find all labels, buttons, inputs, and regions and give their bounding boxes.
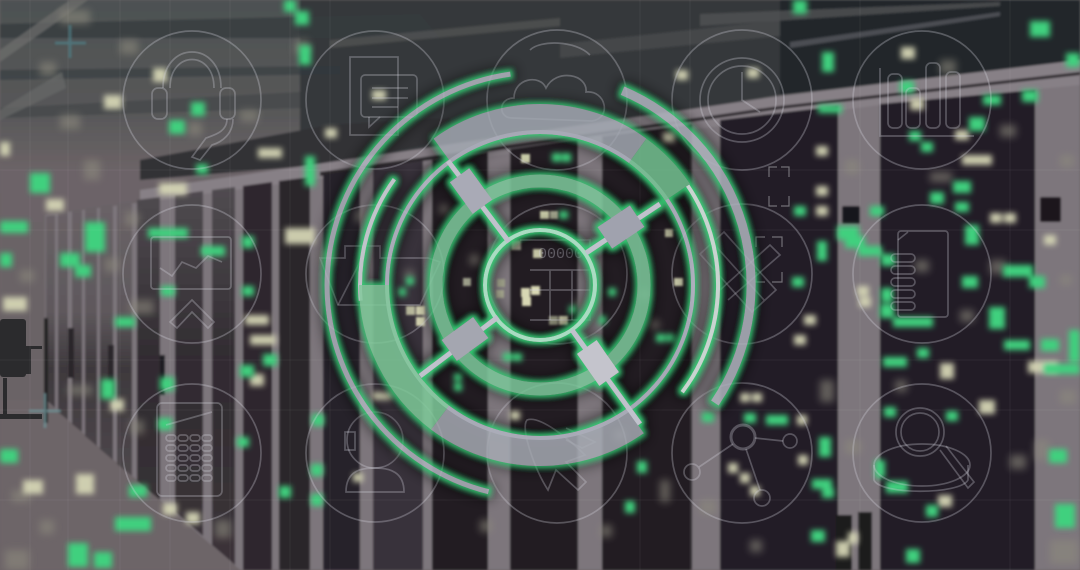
icon: monitor with trend and stand	[123, 205, 261, 343]
crosshair block south east	[577, 340, 619, 386]
thick band top grey	[442, 119, 638, 151]
icon: clipboard and chat	[306, 31, 444, 169]
plus mark top left	[55, 25, 86, 58]
server rack columns	[44, 90, 1061, 570]
icon: magnifier over disc	[853, 384, 991, 522]
thick band top green	[638, 151, 678, 192]
icon: calculator	[123, 384, 261, 522]
icon: folder	[306, 205, 444, 343]
icon: network nodes	[672, 383, 812, 523]
crosshair block south west	[442, 317, 488, 361]
icon: headset	[123, 31, 261, 169]
icon: clock gauge	[672, 30, 812, 170]
middle arc left	[360, 179, 394, 301]
sharp squares near the target centre	[406, 154, 683, 326]
concentric target with glow	[327, 74, 751, 492]
middle arc right	[682, 186, 718, 392]
icon: pencil	[672, 204, 812, 344]
crosshair block north west	[450, 168, 492, 214]
icon: spiral notebook	[853, 205, 991, 343]
thick band left green	[374, 285, 440, 418]
circular icon set	[123, 30, 991, 523]
icon: cursor arrow	[487, 383, 627, 523]
thick band bottom grey	[440, 418, 635, 451]
plus mark bottom left	[29, 393, 61, 428]
icon: bar chart	[853, 31, 991, 169]
crosshair block north east	[598, 205, 644, 249]
thin ring	[387, 132, 693, 438]
outer arc left	[327, 74, 510, 492]
target brackets	[756, 167, 789, 282]
outer arc right	[622, 91, 751, 403]
icon: people	[306, 384, 444, 522]
icon: screen with digits: 00000	[538, 246, 583, 263]
office chair	[0, 319, 42, 419]
icon: screen with digits	[487, 204, 627, 344]
icon: cloud	[487, 30, 627, 170]
inner ring	[485, 230, 595, 340]
middle ring	[436, 181, 644, 389]
crosshair spokes	[420, 161, 660, 424]
